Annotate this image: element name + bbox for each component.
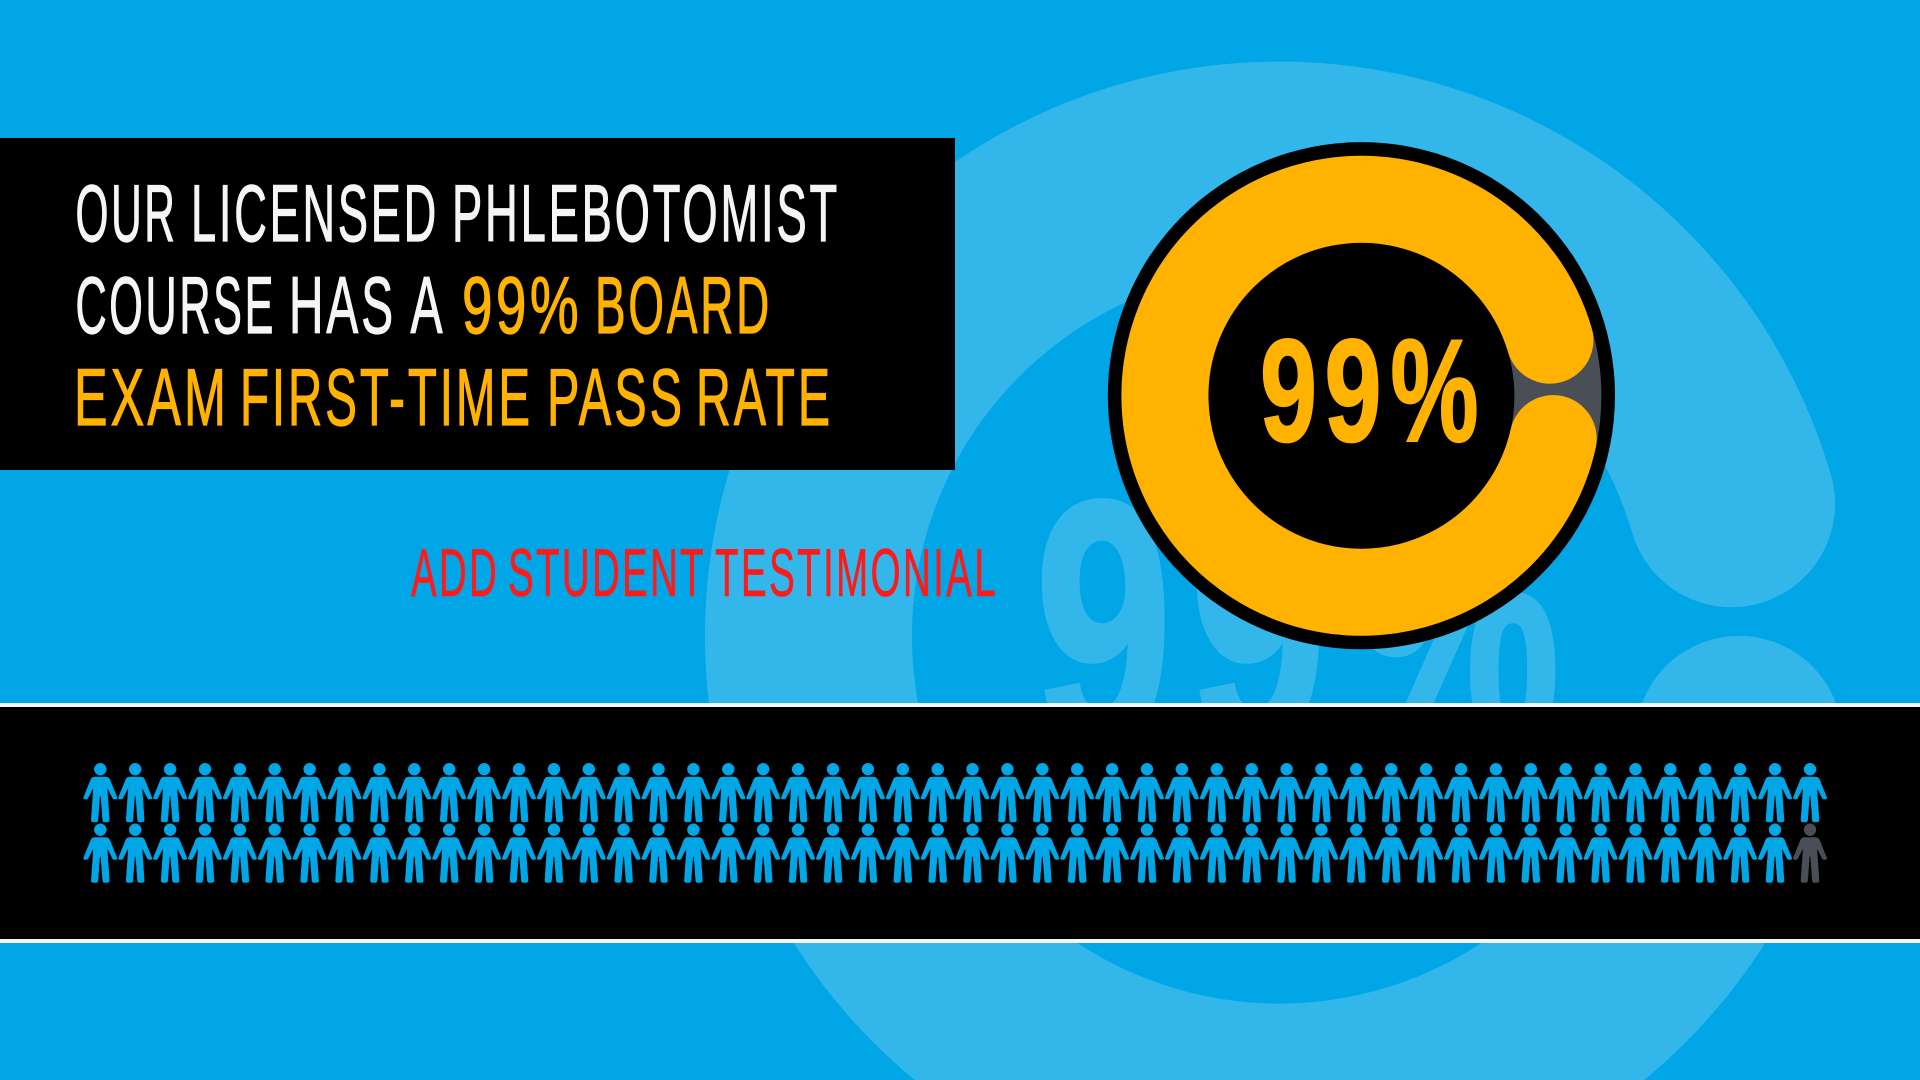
donut chart: 99%: 9 [1260,309,1317,472]
panel: headline: OUR [76,169,178,259]
donut chart: 99%: 9 [1324,309,1382,472]
panel: headline: COURSE [76,261,276,351]
donut chart: 99%: % [1390,309,1478,472]
panel: headline [0,138,955,470]
panel: headline: PHLEBOTOMIST [452,169,840,259]
panel: people band [0,703,1920,943]
panel: headline: 99% [462,261,582,351]
background ghost 99% text: 9 [1190,429,1327,820]
icon row: 49 people plus one grey person [84,824,1827,882]
background ghost 99% text [1035,429,1560,820]
panel: headline: PASS [547,353,685,443]
icon row: 50 people [84,763,1827,822]
testimonial placeholder [411,535,998,611]
background ghost 99% text: % [1349,429,1560,820]
background ghost ring [808,165,1739,1080]
panel: headline: EXAM [74,353,229,443]
panel: headline: FIRST-TIME [240,353,533,443]
background ghost 99% text: 9 [1035,429,1172,820]
testimonial placeholder: TESTIMONIAL [715,535,998,611]
panel: headline: BOARD [595,261,772,351]
panel: headline: HAS [289,261,396,351]
panel: headline: A [410,261,446,351]
panel: headline: RATE [696,353,833,443]
testimonial placeholder: STUDENT [508,535,706,611]
testimonial placeholder: ADD [411,535,499,611]
donut chart: 99% [1108,142,1615,649]
panel: headline: LICENSED [191,169,439,259]
